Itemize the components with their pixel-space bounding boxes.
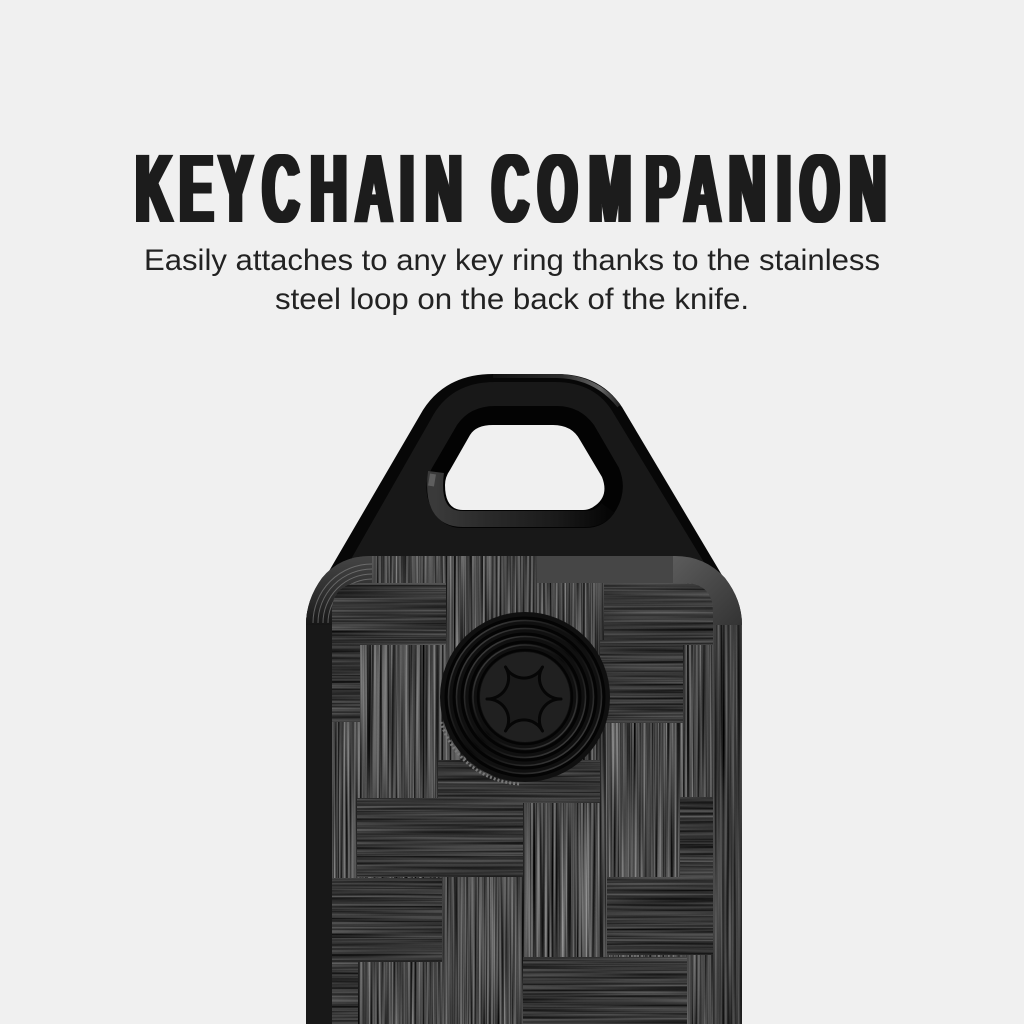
screw centre disc: [480, 652, 570, 742]
woven face: [332, 583, 713, 1024]
title: KEYCHAIN COMPANION: [136, 135, 886, 243]
carbon fibre body: [306, 556, 742, 1024]
loop hole: [445, 425, 604, 510]
body base: [306, 570, 742, 624]
right bevel: [713, 625, 742, 1024]
horizontal grain weave blocks: [332, 583, 713, 1024]
subtitle line 2: steel loop on the back of the knife.: [275, 283, 749, 316]
horizontal grain: [332, 583, 713, 1024]
recess lower bevel: [435, 472, 608, 519]
ring 1: [446, 618, 604, 776]
recess left highlight: [431, 474, 433, 486]
ring 5: [478, 650, 572, 744]
arc 4: [313, 564, 372, 623]
arc 2: [323, 574, 372, 623]
vertical grain weave: [332, 583, 713, 1024]
top bevel light grain: [372, 556, 537, 583]
ring 4 highlight: [473, 645, 577, 749]
top right bevel corner: [673, 556, 742, 625]
ring 2: [454, 626, 596, 768]
ring 4: [470, 642, 580, 752]
loop top edge highlight: [493, 376, 619, 406]
loop front face: [338, 382, 716, 582]
loop outer plate: [318, 374, 732, 592]
keyring loop: [318, 374, 732, 592]
torx screw: [440, 612, 610, 784]
torx star recess: [487, 667, 561, 731]
left bevel: [306, 610, 332, 1024]
loop recess: [426, 406, 623, 528]
top bevel right grain: [537, 556, 673, 583]
top left bevel arcs: [313, 564, 372, 623]
screw head: [440, 612, 610, 782]
subtitle text: [144, 244, 880, 316]
subtitle line 1: Easily attaches to any key ring thanks to the stainless: [144, 244, 880, 277]
ring 2 highlight: [456, 628, 594, 766]
ring 3 highlight: [464, 636, 586, 758]
ring 1 highlight: [448, 620, 602, 774]
arc 1: [328, 579, 372, 623]
concentric rings: [446, 618, 604, 776]
ring 3: [462, 634, 588, 760]
knife illustration: [306, 374, 742, 1024]
arc 3: [318, 569, 372, 623]
top left bevel corner: [306, 556, 372, 625]
knurled edge: [441, 722, 520, 784]
